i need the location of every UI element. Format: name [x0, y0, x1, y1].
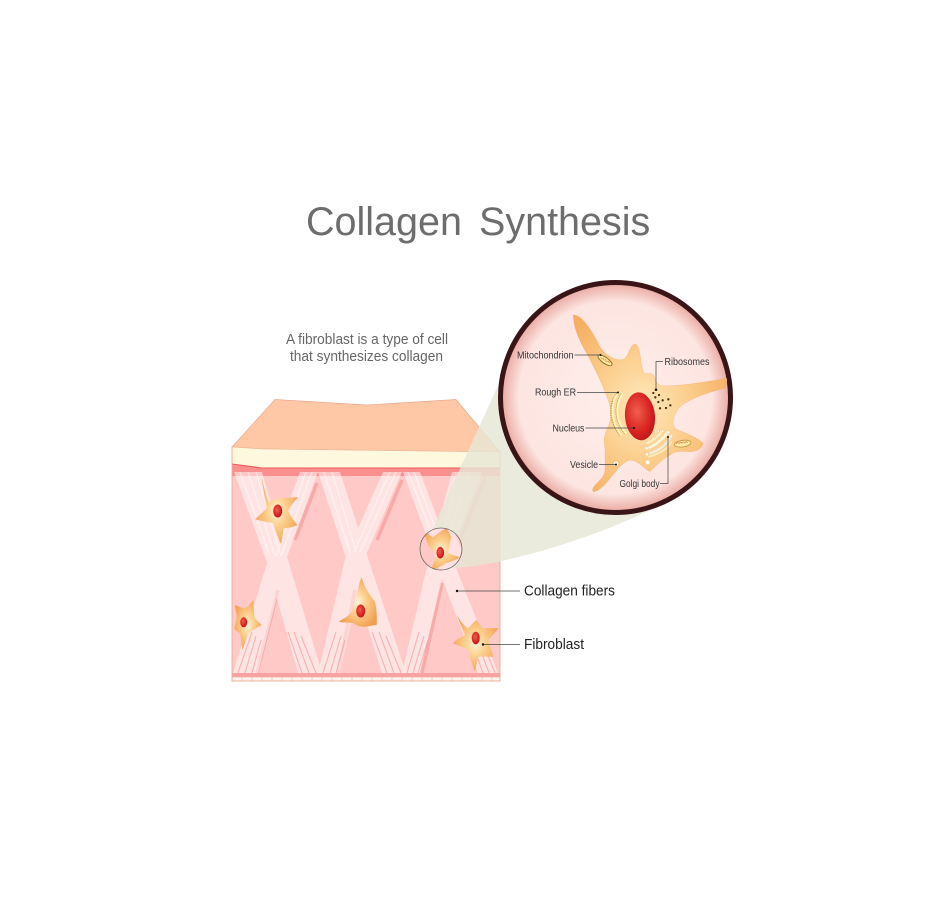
title: Collagen — [306, 200, 462, 244]
golgi body — [646, 431, 672, 457]
small selection circle — [420, 528, 462, 570]
magnification cone — [433, 357, 650, 568]
infographic — [231, 206, 733, 682]
mitochondrion upper — [596, 353, 614, 368]
bottom band — [232, 673, 500, 678]
block outline — [232, 447, 500, 681]
cell part labels: Ribosomes — [664, 357, 710, 368]
fibroblast cell: lower right — [453, 615, 498, 672]
title: Synthesis — [479, 200, 650, 244]
cell part labels: Rough ER — [535, 388, 576, 398]
large fibroblast — [573, 315, 727, 492]
collagen fibers — [233, 472, 498, 673]
label: fibroblast — [482, 637, 584, 653]
red band — [232, 464, 500, 476]
description text: A fibroblast is a type of cell — [286, 332, 448, 348]
callout dots — [600, 354, 669, 466]
dermis — [232, 464, 500, 681]
fibroblast cell: top left — [255, 478, 298, 544]
rough ER — [612, 393, 626, 436]
magnified view — [500, 282, 730, 512]
lens — [500, 282, 730, 512]
ribosomes — [652, 388, 671, 409]
mitochondrion lower — [674, 439, 691, 448]
fibroblast cell: lower left — [234, 600, 262, 650]
description text — [286, 332, 448, 365]
skin surface — [232, 400, 500, 452]
cream layer — [232, 447, 500, 469]
cell part labels: Mitochondrion — [517, 350, 574, 362]
label: fibroblast: Fibroblast — [524, 637, 584, 653]
fibroblast cell: center — [339, 577, 377, 627]
magnified cell in small circle — [420, 528, 462, 570]
title — [306, 200, 650, 244]
cell part labels — [517, 350, 710, 490]
callout lines — [574, 355, 668, 484]
nucleus — [623, 391, 657, 442]
description text: that synthesizes collagen — [290, 349, 443, 365]
tissue block — [232, 400, 500, 681]
cell part labels: Vesicle — [570, 460, 598, 471]
cell part labels: Golgi body — [620, 479, 660, 490]
label: collagen fibers: Collagen fibers — [524, 584, 615, 600]
cell part labels: Nucleus — [552, 424, 584, 434]
